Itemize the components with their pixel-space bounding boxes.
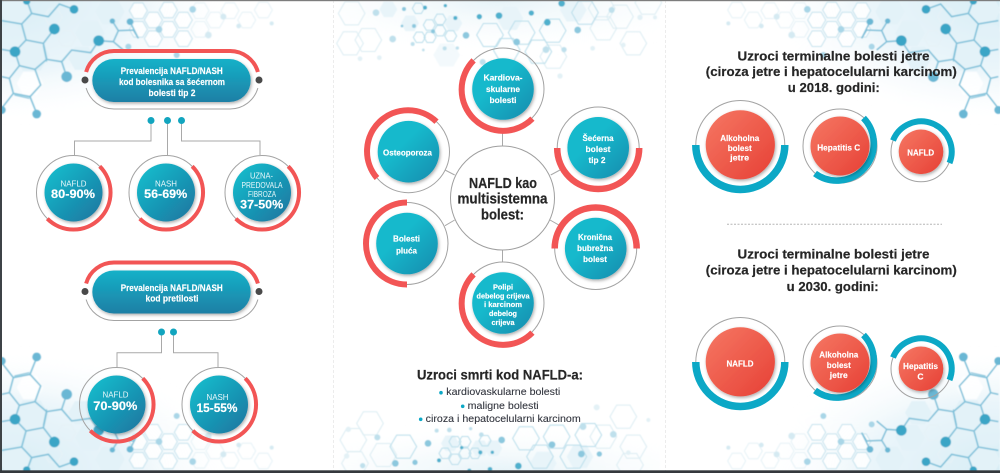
satellite: type 2 diabetes: bolest xyxy=(586,145,611,154)
hub circle: multisistemna xyxy=(458,192,548,208)
hub circle: bolest: xyxy=(481,208,524,224)
circle: NAFLD 80-90%: NAFLD xyxy=(60,178,86,188)
pill heading: type 2 diabetes xyxy=(82,51,262,109)
satellite: cardiovascular: skularne xyxy=(486,85,521,94)
pill heading: obesity xyxy=(82,262,262,320)
circle 2030: NAFLD: NAFLD xyxy=(726,358,754,368)
circle: advanced fibrosis 37-50%: 37-50% xyxy=(240,200,283,212)
circle 2030: hepatitis C xyxy=(891,338,952,399)
circle: NAFLD 80-90%: 80-90% xyxy=(51,189,95,201)
heading: 2018: u 2018. godini: xyxy=(788,80,880,95)
connectors: obesity tree xyxy=(117,328,218,367)
circle: NASH 56-69% xyxy=(129,156,203,230)
circle: NASH 56-69%: 56-69% xyxy=(144,189,187,201)
connectors: diabetes tree xyxy=(74,117,260,155)
satellite: type 2 diabetes xyxy=(557,107,639,189)
satellite: colon polyps and carcinoma: Polipi xyxy=(493,285,513,292)
pill heading: type 2 diabetes: bolesti tip 2 xyxy=(148,88,196,98)
circle: advanced fibrosis 37-50%: PREDOVALA xyxy=(242,181,283,190)
satellite: cardiovascular xyxy=(462,48,544,131)
satellite: type 2 diabetes: tip 2 xyxy=(588,156,606,165)
pill heading: obesity: Prevalencija NAFLD/NASH xyxy=(121,283,223,293)
satellite: colon polyps and carcinoma: i karcinom xyxy=(484,302,522,309)
circle: NASH 15-55% xyxy=(182,368,256,442)
circle 2030: hepatitis C: C xyxy=(917,371,924,381)
heading: 2030 xyxy=(706,246,957,294)
satellite: lung disease: pluća xyxy=(396,246,418,256)
satellite: lung disease xyxy=(366,202,448,284)
heading: 2030: Uzroci terminalne bolesti jetre xyxy=(738,246,930,262)
circle 2018: hepatitis C xyxy=(803,109,877,183)
heading: 2030: u 2030. godini: xyxy=(787,279,879,294)
list: causes of death xyxy=(419,387,581,425)
heading: 2018: (ciroza jetre i hepatocelularni karcinom) xyxy=(706,64,957,79)
circle: advanced fibrosis 37-50% xyxy=(225,156,299,230)
circle: NAFLD 70-90%: NAFLD xyxy=(102,390,128,400)
pill heading: obesity: kod pretilosti xyxy=(146,294,198,304)
hub circle xyxy=(450,146,554,250)
heading: causes of death: Uzroci smrti kod NAFLD-a: xyxy=(417,368,583,382)
circle 2030: alcoholic liver disease: Alkoholna xyxy=(819,350,859,360)
circle 2018: alcoholic liver disease xyxy=(696,100,785,190)
panel: causes of end-stage liver disease xyxy=(696,48,957,406)
satellite: cardiovascular: Kardiova- xyxy=(484,74,523,82)
hub circle: NAFLD kao xyxy=(469,176,537,192)
heading: 2030: (ciroza jetre i hepatocelularni karcinom) xyxy=(706,262,957,278)
pill heading: type 2 diabetes: kod bolesnika sa šećernom xyxy=(119,77,225,87)
circle 2030: alcoholic liver disease: bolest xyxy=(827,360,851,370)
satellite: colon polyps and carcinoma: debelog crijeva xyxy=(476,293,530,300)
satellite: colon polyps and carcinoma: crijeva xyxy=(492,320,515,327)
circle 2018: NAFLD xyxy=(891,121,952,182)
pill heading: type 2 diabetes: Prevalencija NAFLD/NASH xyxy=(121,66,223,76)
circle: NASH 15-55%: NASH xyxy=(206,392,228,402)
list: causes of death: ciroza i hepatocelularni karcinom xyxy=(426,414,581,425)
satellite: lung disease: Bolesti xyxy=(393,234,420,244)
circle: advanced fibrosis 37-50%: FIBROZA xyxy=(248,190,277,199)
circle: NAFLD 70-90% xyxy=(80,368,154,442)
list: causes of death: kardiovaskularne bolesti xyxy=(446,387,560,398)
circle 2018: alcoholic liver disease: jetre xyxy=(729,152,749,162)
satellite: colon polyps and carcinoma: debelog xyxy=(489,311,517,318)
satellite: cardiovascular: bolesti xyxy=(490,96,516,105)
circle 2018: alcoholic liver disease: Alkoholna xyxy=(720,133,759,143)
connectors: hub spokes xyxy=(445,133,560,262)
heading: 2018 xyxy=(706,48,957,95)
circle 2030: alcoholic liver disease xyxy=(803,326,877,400)
circle 2030: NAFLD xyxy=(696,318,785,406)
list: causes of death: maligne bolesti xyxy=(468,401,539,412)
satellite: osteoporosis xyxy=(367,110,450,193)
satellite: colon polyps and carcinoma xyxy=(462,262,544,345)
circle: NASH 56-69%: NASH xyxy=(155,178,177,188)
panel: prevalence NAFLD/NASH xyxy=(36,51,299,442)
heading: 2018: Uzroci terminalne bolesti jetre xyxy=(738,48,930,64)
circle: NAFLD 70-90%: 70-90% xyxy=(93,401,137,413)
satellite: chronic kidney disease: bolest xyxy=(583,255,607,264)
satellite: type 2 diabetes: Šećerna xyxy=(582,134,614,143)
circle 2030: hepatitis C: Hepatitis xyxy=(903,361,938,371)
circle: NAFLD 80-90% xyxy=(36,156,111,230)
circle 2018: alcoholic liver disease: bolest xyxy=(728,143,752,153)
satellite: osteoporosis: Osteoporoza xyxy=(383,148,433,158)
panel: NAFLD as a multisystem disease xyxy=(366,48,639,425)
circle 2018: NAFLD: NAFLD xyxy=(907,147,934,157)
satellite: chronic kidney disease: Kronična xyxy=(578,233,613,242)
circle: NASH 15-55%: 15-55% xyxy=(196,403,238,415)
circle: advanced fibrosis 37-50%: UZNA- xyxy=(250,172,273,180)
circle 2018: hepatitis C: Hepatitis C xyxy=(817,142,860,152)
circle 2030: alcoholic liver disease: jetre xyxy=(829,370,848,380)
satellite: chronic kidney disease: bubrežna xyxy=(577,244,614,253)
satellite: chronic kidney disease xyxy=(555,208,637,290)
